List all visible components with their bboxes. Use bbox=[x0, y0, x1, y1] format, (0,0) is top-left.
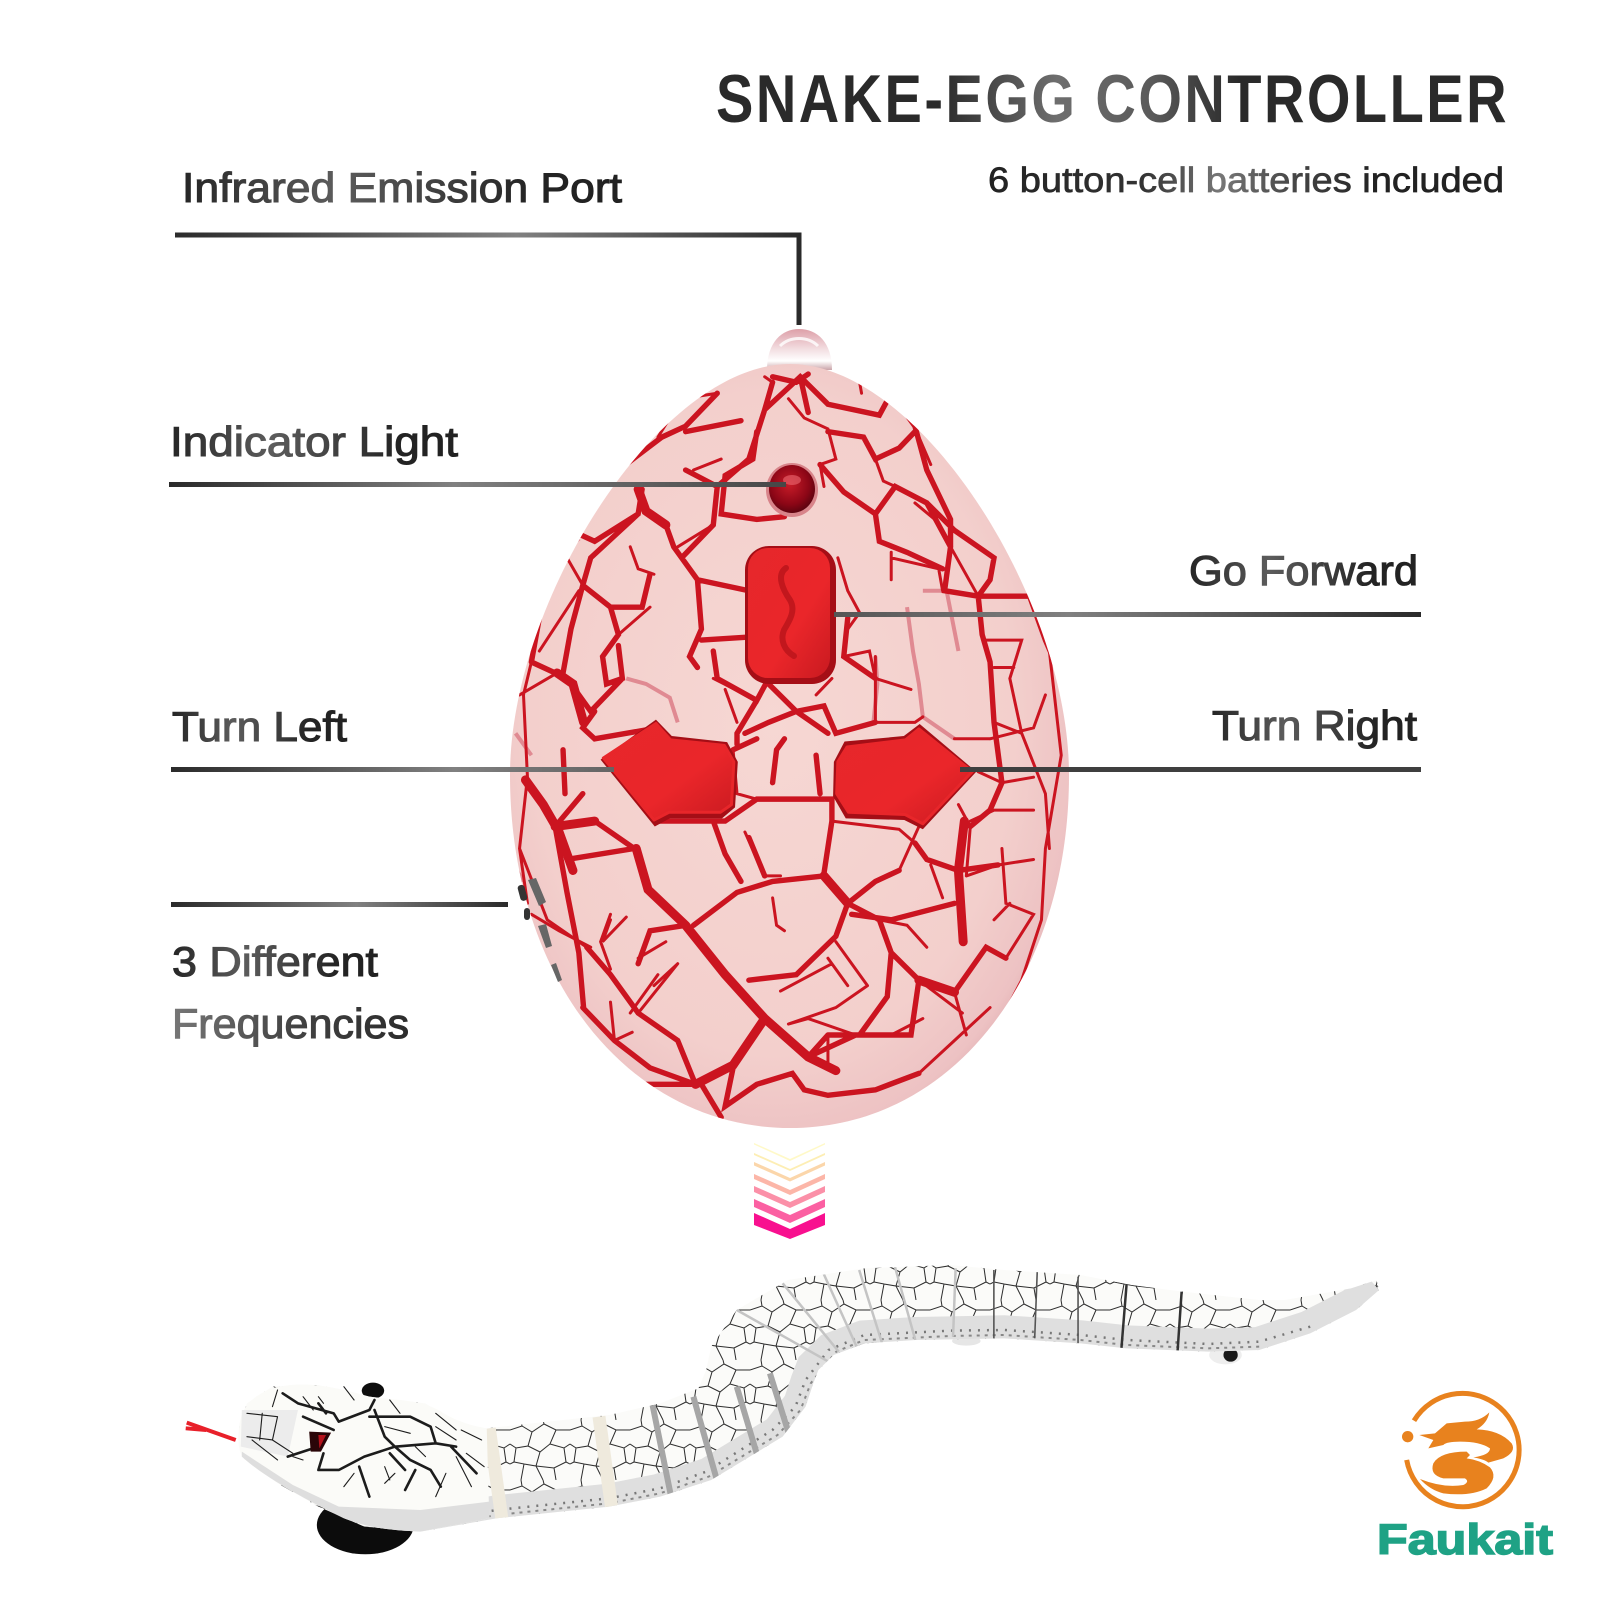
egg controller bbox=[504, 329, 1069, 1128]
snake icon on button bbox=[781, 568, 794, 656]
leader line: indicator light bbox=[169, 482, 786, 487]
subtitle: batteries note: 6 button-cell batteries included bbox=[988, 161, 1504, 200]
leader line: turn left bbox=[171, 767, 614, 772]
leader line: frequencies bbox=[171, 902, 508, 907]
label: turn left: Turn Left bbox=[172, 703, 347, 750]
downward chevrons bbox=[754, 1143, 825, 1239]
toy snake bbox=[186, 1265, 1379, 1554]
snake head bbox=[238, 1385, 489, 1532]
body segment gaps bbox=[489, 1267, 1182, 1520]
underside band bbox=[420, 1290, 1379, 1532]
infrared bulb bbox=[767, 329, 832, 370]
label: go forward: Go Forward bbox=[1189, 547, 1418, 594]
label: indicator light: Indicator Light bbox=[170, 418, 458, 465]
logo ring and dragon bbox=[1402, 1393, 1519, 1507]
right arrow button bbox=[833, 724, 976, 829]
head bump bbox=[362, 1383, 384, 1399]
label: 3 different frequencies bbox=[172, 938, 409, 1047]
label: 3 different frequencies: Frequencies bbox=[172, 1000, 409, 1047]
snake eye bbox=[309, 1432, 331, 1452]
label: infrared emission port: Infrared Emission Port bbox=[182, 164, 622, 211]
tongue bbox=[186, 1423, 236, 1440]
leader line: turn right bbox=[960, 767, 1421, 772]
front wheel bbox=[317, 1496, 414, 1554]
frequency switch marks bbox=[517, 878, 562, 982]
left arrow button bbox=[601, 720, 738, 827]
label: 3 different frequencies: 3 Different bbox=[172, 938, 378, 985]
egg shell bbox=[510, 364, 1069, 1128]
snake body bbox=[239, 1265, 1379, 1531]
leader line: go forward bbox=[834, 612, 1421, 617]
shell cracks bbox=[504, 374, 1069, 1117]
indicator light bbox=[766, 463, 818, 517]
leader line: infrared port bbox=[175, 235, 799, 325]
rear wheels bbox=[952, 1336, 1242, 1364]
label: turn right: Turn Right bbox=[1212, 702, 1417, 749]
brand logo bbox=[1377, 1393, 1553, 1564]
forward button bbox=[745, 546, 836, 684]
logo wordmark: Faukait bbox=[1377, 1516, 1553, 1564]
